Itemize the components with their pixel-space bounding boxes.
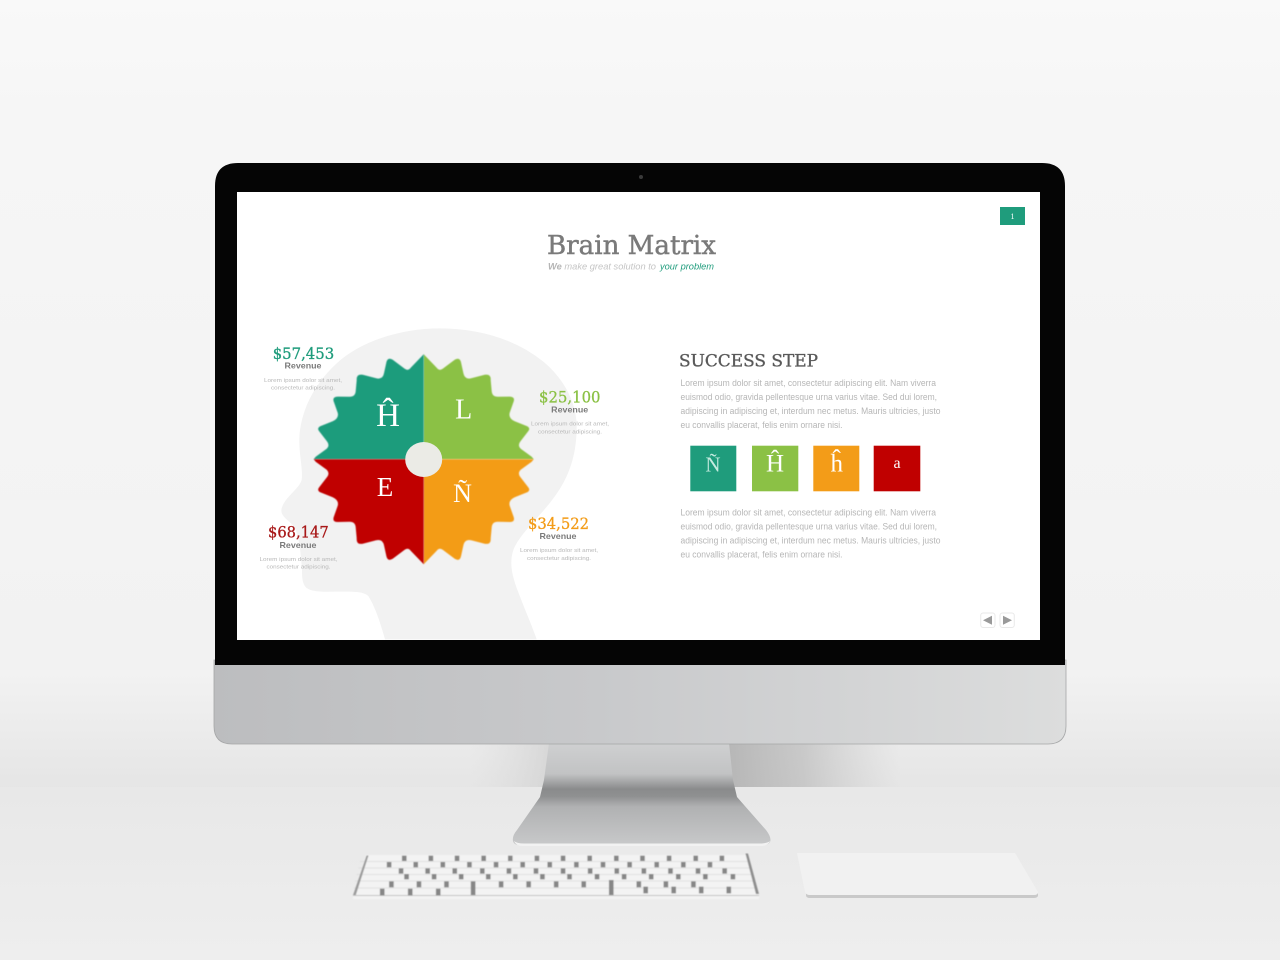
step square: green	[752, 446, 798, 491]
step square: red	[874, 446, 920, 491]
step square: green: Ĥ	[766, 450, 784, 478]
step icons	[690, 446, 920, 491]
title: Brain Matrix	[547, 231, 716, 261]
gear letter: orange: Ñ	[453, 479, 472, 508]
paragraph two: adipiscing in adipiscing et, interdum nec metus. Mauris ultricies, justo	[680, 535, 941, 545]
paragraph two: eu convallis placerat, felis enim ornare nisi.	[680, 549, 842, 559]
keyboard	[353, 854, 759, 899]
head silhouette	[281, 328, 577, 639]
paragraph two	[680, 507, 941, 559]
gear quadrant: teal top left	[314, 354, 424, 459]
gear centre hub	[405, 442, 442, 477]
subtitle: your problem	[659, 262, 715, 272]
callout: orange revenue: Lorem ipsum dolor sit amet,	[520, 548, 598, 554]
callout: green revenue	[531, 388, 609, 436]
gear quadrant: orange bottom right	[424, 459, 534, 564]
paragraph two: Lorem ipsum dolor sit amet, consectetur adipiscing elit. Nam viverra	[680, 507, 936, 517]
heading: success step: SUCCESS STEP	[679, 352, 818, 372]
stand base rim	[514, 841, 770, 846]
page number badge: 1	[1010, 212, 1014, 221]
callout: teal revenue: $57,453	[273, 344, 334, 363]
callout: orange revenue: $34,522	[528, 514, 589, 533]
gear quadrant: green top right	[424, 354, 534, 459]
paragraph one: Lorem ipsum dolor sit amet, consectetur adipiscing elit. Nam viverra	[680, 378, 936, 388]
callout: green revenue: consectetur adipiscing.	[538, 430, 602, 436]
step square: teal	[690, 446, 736, 491]
gear letter: teal: Ĥ	[376, 397, 400, 434]
callout: orange revenue: consectetur adipiscing.	[527, 556, 591, 562]
monitor chin	[214, 660, 1066, 744]
subtitle	[548, 262, 715, 272]
gear chart	[314, 354, 534, 564]
callout: green revenue: $25,100	[539, 388, 600, 407]
paragraph one	[680, 378, 941, 430]
callout: green revenue: Revenue	[551, 404, 588, 414]
step square: orange: ĥ	[830, 449, 843, 478]
subtitle: We make great solution to	[548, 262, 656, 272]
step square: red: a	[893, 455, 901, 472]
gear letter: green: L	[455, 395, 472, 426]
trackpad	[797, 853, 1038, 898]
callout: orange revenue: Revenue	[540, 531, 577, 541]
nav button: next	[1000, 613, 1014, 628]
paragraph one: euismod odio, gravida pellentesque urna varius vitae. Sed dui lorem,	[680, 392, 937, 402]
monitor black bezel	[215, 163, 1065, 665]
step square: teal: Ñ	[705, 452, 721, 476]
callout: red revenue: Lorem ipsum dolor sit amet,	[260, 557, 338, 563]
nav button: previous	[981, 613, 995, 628]
paragraph two: euismod odio, gravida pellentesque urna varius vitae. Sed dui lorem,	[680, 521, 937, 531]
callout: red revenue: $68,147	[268, 523, 329, 542]
callout: teal revenue	[264, 344, 342, 392]
paragraph one: adipiscing in adipiscing et, interdum nec metus. Mauris ultricies, justo	[680, 406, 941, 416]
callout: red revenue	[260, 523, 338, 571]
gear quadrant: red bottom left	[314, 459, 424, 564]
callout: red revenue: Revenue	[280, 540, 317, 550]
screen panel	[237, 192, 1040, 640]
callout: orange revenue	[520, 514, 598, 562]
callout: teal revenue: Revenue	[284, 361, 322, 371]
gear letter: red: E	[377, 472, 393, 502]
monitor stand	[513, 743, 770, 846]
callout: red revenue: consectetur adipiscing.	[266, 565, 331, 571]
callout: teal revenue: Lorem ipsum dolor sit amet,	[264, 378, 342, 384]
webcam	[639, 175, 643, 179]
paragraph one: eu convallis placerat, felis enim ornare nisi.	[680, 420, 842, 430]
step square: orange	[813, 446, 859, 491]
callout: teal revenue: consectetur adipiscing.	[271, 386, 335, 392]
page number badge	[1000, 207, 1025, 225]
callout: green revenue: Lorem ipsum dolor sit amet,	[531, 422, 609, 428]
